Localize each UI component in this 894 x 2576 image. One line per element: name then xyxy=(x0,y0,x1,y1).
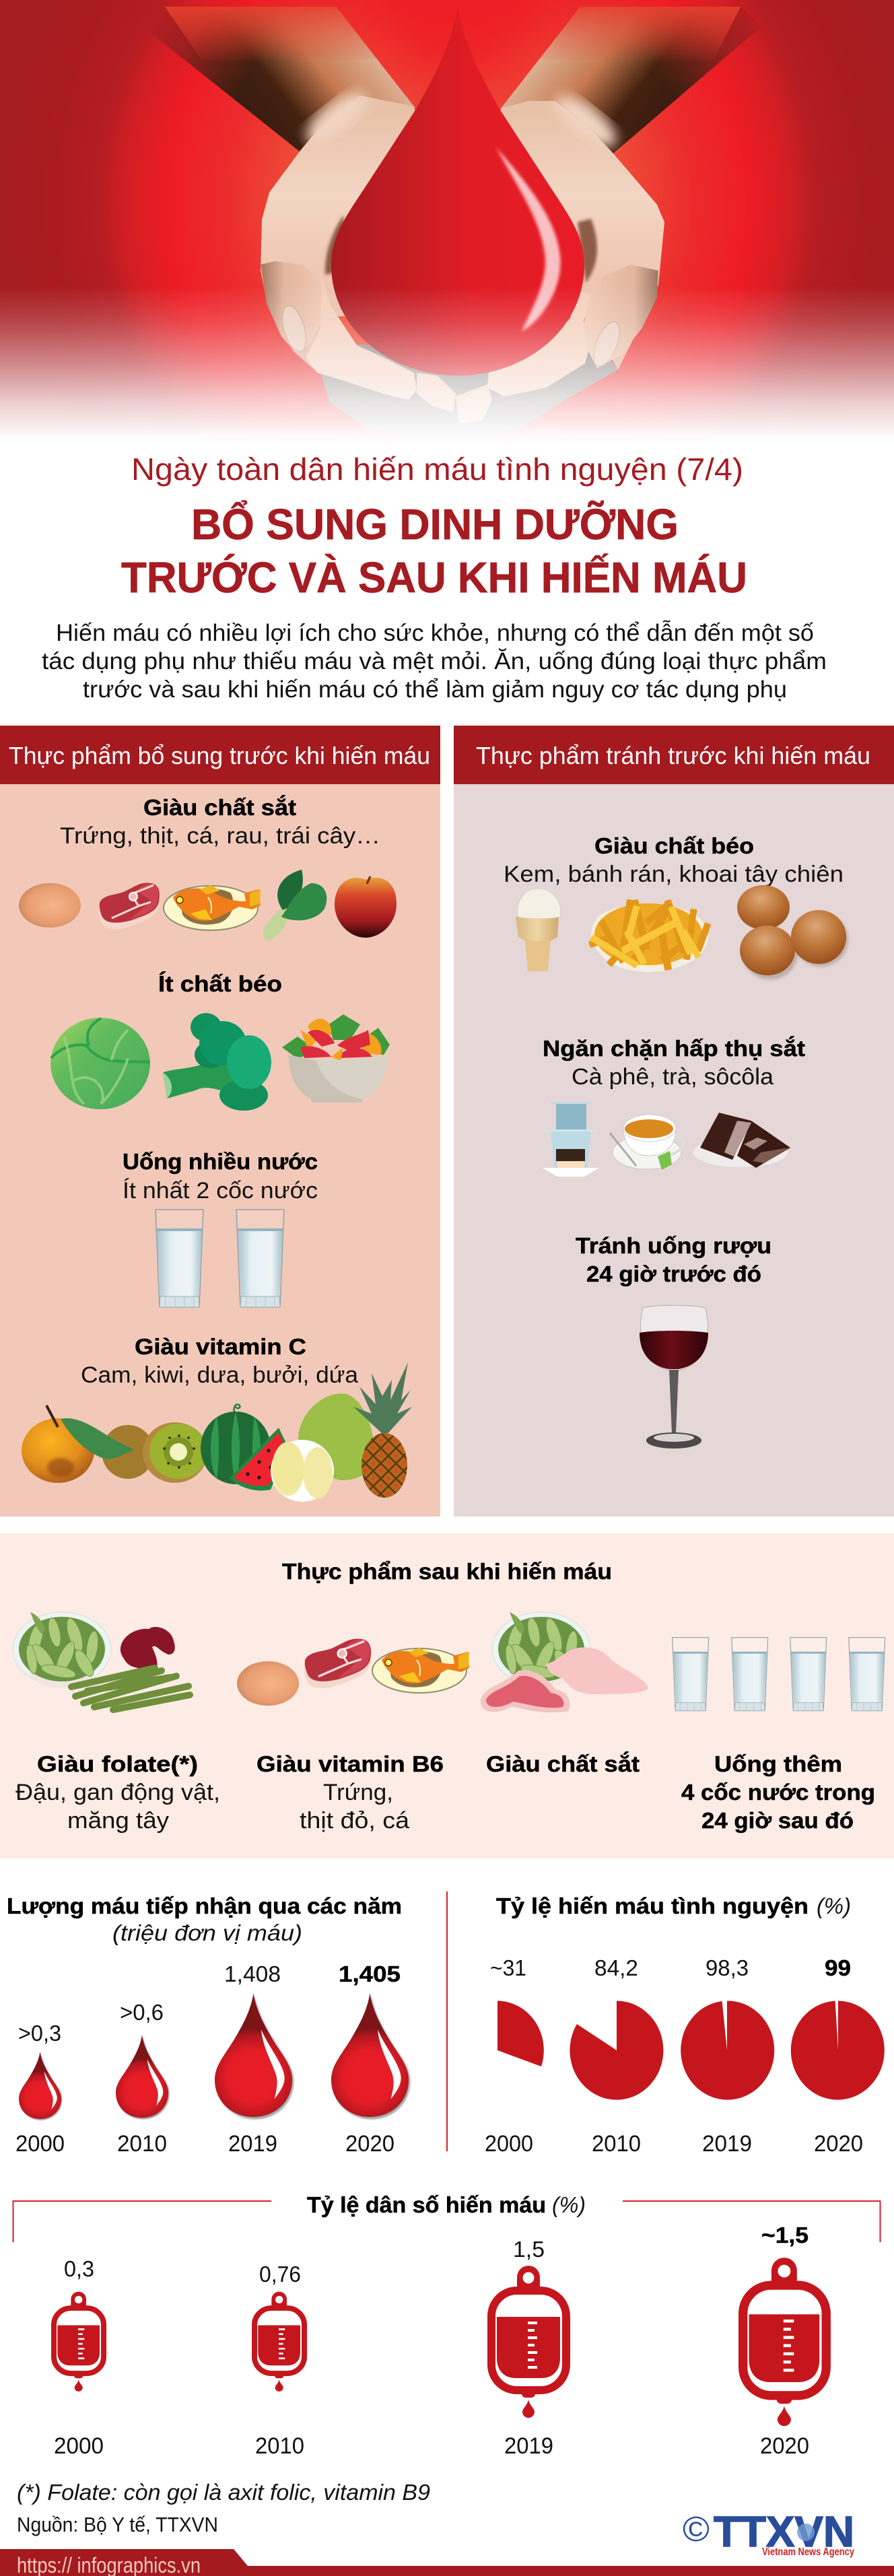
blood bag 2000 xyxy=(54,2292,104,2392)
icon: meat xyxy=(98,883,160,929)
title: BỔ SUNG DINH DƯỠNG xyxy=(191,499,679,549)
icon: water glass 1 xyxy=(156,1210,203,1307)
heading: avoid alcohol xyxy=(576,1233,771,1286)
panel: foods after donating xyxy=(0,1533,894,1858)
title: TRƯỚC VÀ SAU KHI HIẾN MÁU xyxy=(121,553,747,602)
text: folate: Giàu folate(*) xyxy=(37,1751,198,1776)
text: extra water: Uống thêm xyxy=(714,1751,842,1776)
intro paragraph: Hiến máu có nhiều lợi ích cho sức khỏe, nhưng có thể dẫn đến một số xyxy=(56,620,814,646)
icon: soybean bowl xyxy=(13,1612,111,1688)
intro paragraph: trước và sau khi hiến máu có thể làm giảm nguy cơ tác dụng phụ xyxy=(83,676,787,703)
intro paragraph xyxy=(42,620,827,703)
year labels: 2000 xyxy=(485,2131,533,2157)
pie 2000 xyxy=(497,2000,544,2066)
chart heading: Lượng máu tiếp nhận qua các năm xyxy=(7,1893,402,1918)
chart: voluntary donation rate xyxy=(485,1893,885,2157)
hero: lower hand shadow xyxy=(318,337,618,446)
text: fatty foods: Kem, bánh rán, khoai tây chiên xyxy=(504,862,844,887)
drop 2010 xyxy=(116,2035,170,2120)
panel header text: Thực phẩm tránh trước khi hiến máu xyxy=(476,742,870,769)
year labels: 2020 xyxy=(760,2433,809,2459)
icon: chicken xyxy=(546,1647,648,1694)
icon: egg xyxy=(19,883,81,928)
year labels: 2020 xyxy=(345,2131,394,2157)
year labels xyxy=(54,2433,809,2459)
icon: tea cup xyxy=(610,1115,683,1170)
value 2019: 98,3 xyxy=(706,1955,749,1980)
value 2010: >0,6 xyxy=(120,2000,164,2025)
value 2020: 1,405 xyxy=(339,1961,401,1986)
icon: watermelon slice xyxy=(230,1428,288,1490)
year labels: 2000 xyxy=(54,2433,104,2459)
icon: apple xyxy=(335,876,397,938)
text: extra water: 24 giờ sau đó xyxy=(701,1808,854,1833)
icon: donuts xyxy=(737,885,848,979)
icon: orange xyxy=(22,1405,135,1483)
text: vitamin B6 xyxy=(256,1751,444,1834)
right palm xyxy=(487,291,591,396)
icon: wine glass xyxy=(640,1305,708,1449)
heading: blocks iron absorption: Ngăn chặn hấp thụ sắt xyxy=(543,1036,805,1061)
icon: meat xyxy=(304,1639,372,1688)
chart: blood received by year xyxy=(7,1893,410,2157)
icon: kiwi cut xyxy=(143,1422,207,1483)
icon: cabbage xyxy=(50,1018,150,1109)
year labels: 2010 xyxy=(592,2131,641,2157)
text: water amount: Ít nhất 2 cốc nước xyxy=(123,1178,318,1204)
logo: TTXVN: Vietnam News Agency xyxy=(762,2546,854,2558)
footer band xyxy=(0,2549,894,2576)
icon: ice cream xyxy=(516,889,561,971)
heading: vitamin C: Giàu vitamin C xyxy=(135,1334,306,1359)
icon: egg xyxy=(237,1661,299,1706)
icon: chocolate xyxy=(693,1113,790,1168)
icon: liver xyxy=(121,1627,175,1669)
year labels: 2000 xyxy=(15,2131,65,2157)
icon: asparagus xyxy=(71,1668,190,1710)
value 2010: 0,76 xyxy=(259,2262,301,2287)
hero: white fade xyxy=(0,286,894,448)
heading: high fat: Giàu chất béo xyxy=(594,833,754,858)
hero: right hand xyxy=(456,87,664,423)
value 2019: 1,408 xyxy=(224,1961,281,1986)
panel: foods to add before donating xyxy=(0,726,440,1517)
text: folate xyxy=(15,1751,220,1834)
icon: fish plate xyxy=(372,1648,469,1693)
panel header text: Thực phẩm bổ sung trước khi hiến máu xyxy=(9,742,430,769)
text: iron: Giàu chất sắt xyxy=(486,1751,640,1776)
hero banner xyxy=(0,0,894,448)
icon: broccoli xyxy=(163,1013,271,1111)
icon: four water glasses xyxy=(673,1638,885,1711)
year labels: 2019 xyxy=(228,2131,277,2157)
value 2020: ~1,5 xyxy=(761,2223,809,2248)
chart: population donation rate xyxy=(13,2192,881,2459)
value 2019: 1,5 xyxy=(513,2237,545,2262)
text: extra water: 4 cốc nước trong xyxy=(681,1780,875,1805)
source: Nguồn: Bộ Y tế, TTXVN xyxy=(17,2513,218,2536)
hero: left arm xyxy=(143,7,414,168)
year labels: 2010 xyxy=(255,2433,304,2459)
year labels xyxy=(485,2131,863,2157)
value 2010: 84,2 xyxy=(594,1955,638,1980)
year labels: 2019 xyxy=(504,2433,553,2459)
icon: soybean bowl xyxy=(492,1612,590,1688)
chart heading: (%) xyxy=(817,1893,851,1918)
blood bag 2020 xyxy=(743,2258,826,2426)
year labels: 2020 xyxy=(814,2131,863,2157)
chart heading: Tỷ lệ dân số hiến máu xyxy=(307,2192,546,2217)
right finger xyxy=(456,384,492,423)
pie 2010 xyxy=(570,2000,663,2100)
text: vitamin B6: Giàu vitamin B6 xyxy=(256,1751,444,1776)
heading: low fat: Ít chất béo xyxy=(158,971,282,996)
year labels xyxy=(15,2131,394,2157)
text: coffee tea chocolate: Cà phê, trà, sôcôla xyxy=(572,1064,773,1090)
icon: french fries xyxy=(588,899,711,972)
heading: drink water: Uống nhiều nước xyxy=(123,1149,318,1174)
value 2000: 0,3 xyxy=(64,2256,94,2281)
hero: left hand xyxy=(261,83,456,412)
drop 2019 xyxy=(215,1993,294,2119)
year labels: 2019 xyxy=(702,2131,752,2157)
chart unit: (triệu đơn vị máu) xyxy=(112,1920,302,1945)
heading: avoid alcohol: 24 giờ trước đó xyxy=(586,1261,761,1286)
text: folate: Đậu, gan động vật, xyxy=(15,1780,220,1805)
text: extra water xyxy=(681,1751,875,1833)
right nail xyxy=(588,318,625,370)
left palm xyxy=(306,277,417,400)
text: vitamin B6: thịt đỏ, cá xyxy=(300,1808,409,1834)
left nail xyxy=(278,303,310,354)
icon: coffee filter xyxy=(543,1102,599,1177)
icon: pork xyxy=(481,1670,570,1712)
title xyxy=(121,499,747,602)
heading: iron rich: Giàu chất sắt xyxy=(143,795,296,820)
icon: pineapple xyxy=(353,1362,412,1498)
icon: kiwi back xyxy=(102,1425,154,1479)
drop 2020 xyxy=(331,1993,410,2119)
left thumb xyxy=(261,261,324,353)
pie 2019 xyxy=(681,2000,774,2099)
blood bag 2010 xyxy=(254,2292,304,2392)
chart heading: Tỷ lệ hiến máu tình nguyện xyxy=(496,1893,809,1918)
panel header xyxy=(454,726,894,784)
chart heading: (%) xyxy=(552,2192,586,2217)
value 2020: 99 xyxy=(825,1955,851,1980)
left finger xyxy=(417,373,456,412)
text: vitamin C foods: Cam, kiwi, dưa, bưởi, dứa xyxy=(81,1362,358,1388)
year labels: 2010 xyxy=(117,2131,167,2157)
hero: right arm xyxy=(501,7,761,168)
blood bag 2019 xyxy=(491,2266,566,2418)
hero: drop highlight xyxy=(496,147,561,331)
panel heading: Thực phẩm sau khi hiến máu xyxy=(282,1559,612,1584)
icon: leafy greens xyxy=(263,870,326,941)
value 2000: ~31 xyxy=(490,1955,526,1980)
heading: avoid alcohol: Tránh uống rượu xyxy=(576,1233,771,1258)
intro paragraph: tác dụng phụ như thiếu máu và mệt mỏi. Ăn, uống đúng loại thực phẩm xyxy=(42,648,827,674)
icon: watermelon xyxy=(201,1404,271,1484)
icon: fish plate xyxy=(164,885,261,930)
value 2000: >0,3 xyxy=(18,2021,61,2046)
text: folate: măng tây xyxy=(67,1808,169,1834)
text: vitamin B6: Trứng, xyxy=(323,1780,393,1805)
icon: pomelo slice xyxy=(271,1440,334,1502)
panel: foods to avoid before donating xyxy=(454,726,894,1517)
text: iron foods: Trứng, thịt, cá, rau, trái cây… xyxy=(60,823,380,849)
logo: TTXVN: TTXVN xyxy=(714,2507,854,2556)
icon: water glass 2 xyxy=(236,1210,284,1307)
icon: pomelo xyxy=(298,1393,374,1480)
pie 2020 xyxy=(791,2000,885,2099)
panel header xyxy=(0,726,440,784)
icon: salad bowl xyxy=(282,1014,390,1103)
subtitle: Ngày toàn dân hiến máu tình nguyện (7/4) xyxy=(131,452,743,487)
drop 2000 xyxy=(19,2052,62,2120)
footnote: (*) Folate: còn gọi là axit folic, vitamin B9 xyxy=(17,2480,430,2505)
logo: TTXVN: © xyxy=(683,2510,710,2549)
right thumb xyxy=(584,265,658,368)
hero: blood drop xyxy=(331,7,584,376)
